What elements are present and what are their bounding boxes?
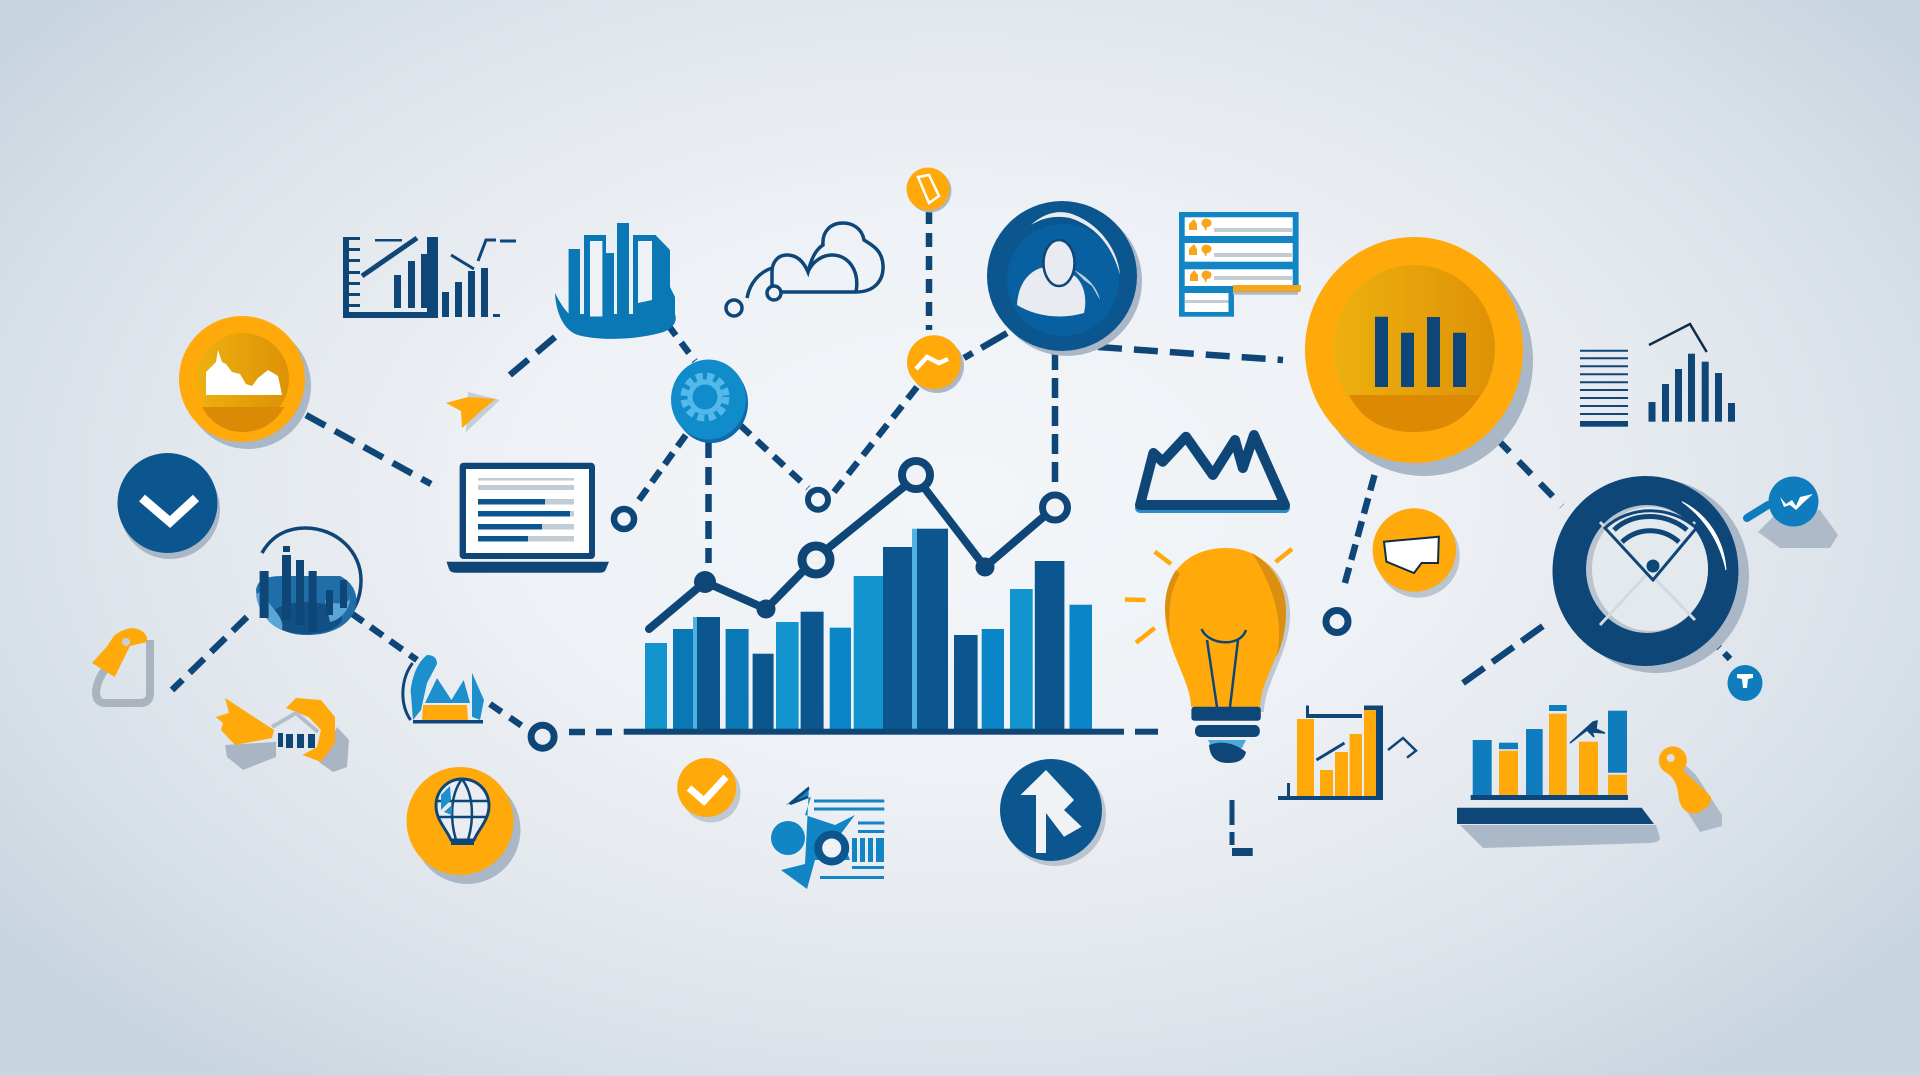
icon: orange trend node	[907, 335, 964, 393]
icon: city in circle	[256, 528, 361, 635]
icon: orange check circle	[677, 758, 740, 822]
icon: cloud outline	[726, 223, 883, 316]
icon: magnifier with pulse	[1747, 476, 1838, 548]
icon: small blue T circle	[1728, 665, 1762, 701]
icon: laptop with report	[446, 463, 609, 573]
dashed connector lines	[172, 210, 1730, 845]
icon: orange badge with balloon globe	[406, 767, 520, 884]
icon: orange key	[1659, 746, 1722, 832]
connector nodes: small rings	[531, 490, 1348, 748]
icon: gear node	[671, 360, 748, 443]
icon: navy ring gauge	[1552, 476, 1749, 673]
icon: outlined combo chart top left	[343, 237, 516, 318]
icon: orange tag with gray loop	[92, 628, 150, 703]
icon: up arrow circle	[1000, 759, 1106, 866]
icon: phone with mountains	[403, 655, 484, 724]
icon: lined table and bar chart	[1580, 324, 1735, 427]
icon: small orange diamond node	[906, 168, 952, 212]
icon: orange lightning arrow	[446, 392, 500, 432]
icon: blue analytics collage	[771, 786, 884, 889]
icon: stacked bars on platform	[1457, 705, 1660, 848]
icon: orange badge with landscape	[179, 316, 311, 449]
icon: blue skyline on cloud	[555, 223, 676, 339]
icon: orange speech badge	[1373, 508, 1460, 598]
line chart over bars	[649, 461, 1068, 629]
central bar chart	[624, 529, 1158, 735]
icon: large orange bar badge	[1305, 237, 1533, 476]
icon: person in blue circle	[987, 201, 1142, 356]
icon: orange hands holding house	[216, 698, 349, 772]
icon: checklist panel	[1179, 212, 1301, 317]
icon: mountain outline	[1140, 435, 1285, 508]
icon: light bulb	[1125, 548, 1292, 856]
icon: blue chevron circle	[118, 453, 220, 559]
icon: orange bar chart with frame	[1278, 706, 1416, 800]
